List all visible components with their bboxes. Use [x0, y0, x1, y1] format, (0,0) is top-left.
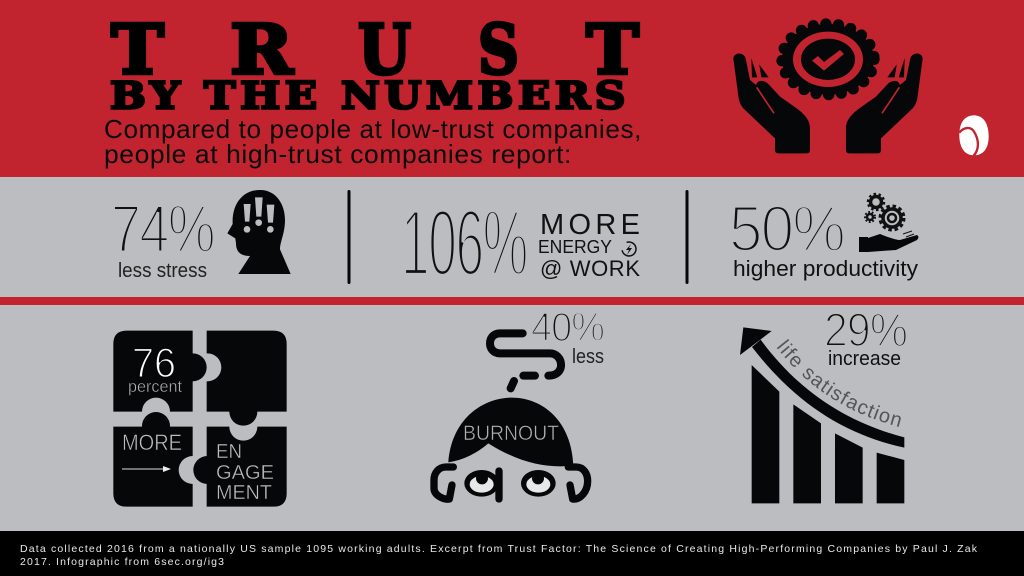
text: source: 2017. Infographic from 6sec.org/ig3	[20, 556, 224, 568]
stat: 106% more energy at work: 106%	[401, 190, 527, 295]
icon: gears over hand	[859, 194, 918, 252]
icon: puzzle: EN	[216, 441, 242, 463]
text: intro: Compared to people at low-trust companies,	[104, 114, 642, 144]
stat: 106% more energy at work: @ WORK	[540, 256, 640, 281]
panel: stats row	[111, 190, 918, 295]
arrow	[122, 466, 171, 472]
stat: 74% less stress	[111, 191, 214, 282]
text: source	[20, 543, 978, 568]
icon: puzzle	[113, 331, 287, 507]
stat: 40% less	[531, 304, 604, 368]
divider	[686, 190, 688, 284]
icon: head with exclamation marks	[227, 190, 291, 274]
icon: puzzle: percent	[128, 377, 182, 396]
stat: 50% higher productivity: 50%	[729, 192, 844, 265]
stat: 106% more energy at work: MORE	[540, 209, 640, 241]
stat: 40% less: less	[572, 346, 604, 368]
icon: puzzle: MENT	[216, 482, 272, 504]
panel: red header	[0, 0, 1024, 177]
icon: burnout head: BURNOUT	[463, 422, 559, 445]
stat: 106% more energy at work: ENERGY	[538, 237, 612, 257]
text: source: Data collected 2016 from a nationally US sample 1095 working adults. Excerpt from Trust Factor: The Science of Creating High-Performing Companies by Paul J. Zak	[20, 543, 978, 555]
stat: 29% increase: 29%	[824, 303, 907, 356]
stat: 50% higher productivity: higher productivity	[733, 256, 918, 281]
icon: puzzle: 76	[132, 339, 176, 386]
icon: puzzle: MORE	[122, 430, 182, 455]
chart: rising bars and arrow	[740, 327, 904, 504]
icon: puzzle: GAGE	[216, 462, 274, 484]
title: TRUST: R	[230, 10, 294, 90]
panel: footer	[0, 531, 1024, 576]
text: intro: people at high-trust companies report:	[104, 139, 572, 169]
stat: 40% less: 40%	[531, 304, 604, 350]
stat: 50% higher productivity	[729, 192, 918, 281]
divider	[348, 190, 350, 284]
text: intro	[104, 114, 642, 169]
icon: white logo	[959, 115, 989, 156]
title: TRUST: T	[111, 10, 164, 90]
icon: hands holding badge	[733, 24, 923, 153]
text: life satisfaction: life satisfaction	[777, 339, 901, 427]
red divider band	[0, 297, 1024, 305]
stat: 29% increase: increase	[828, 348, 901, 370]
icon: energy	[620, 240, 638, 258]
stat: 74% less stress: 74%	[111, 191, 214, 267]
title: TRUST	[111, 10, 639, 90]
icon: burnout head	[434, 333, 588, 499]
stat: 74% less stress: less stress	[118, 260, 207, 282]
heading: by the numbers: BY THE NUMBERS	[110, 74, 630, 118]
panel: lower section	[113, 303, 907, 507]
title: TRUST: T	[586, 10, 639, 90]
title: TRUST: S	[478, 10, 519, 90]
title: TRUST: U	[358, 10, 411, 90]
